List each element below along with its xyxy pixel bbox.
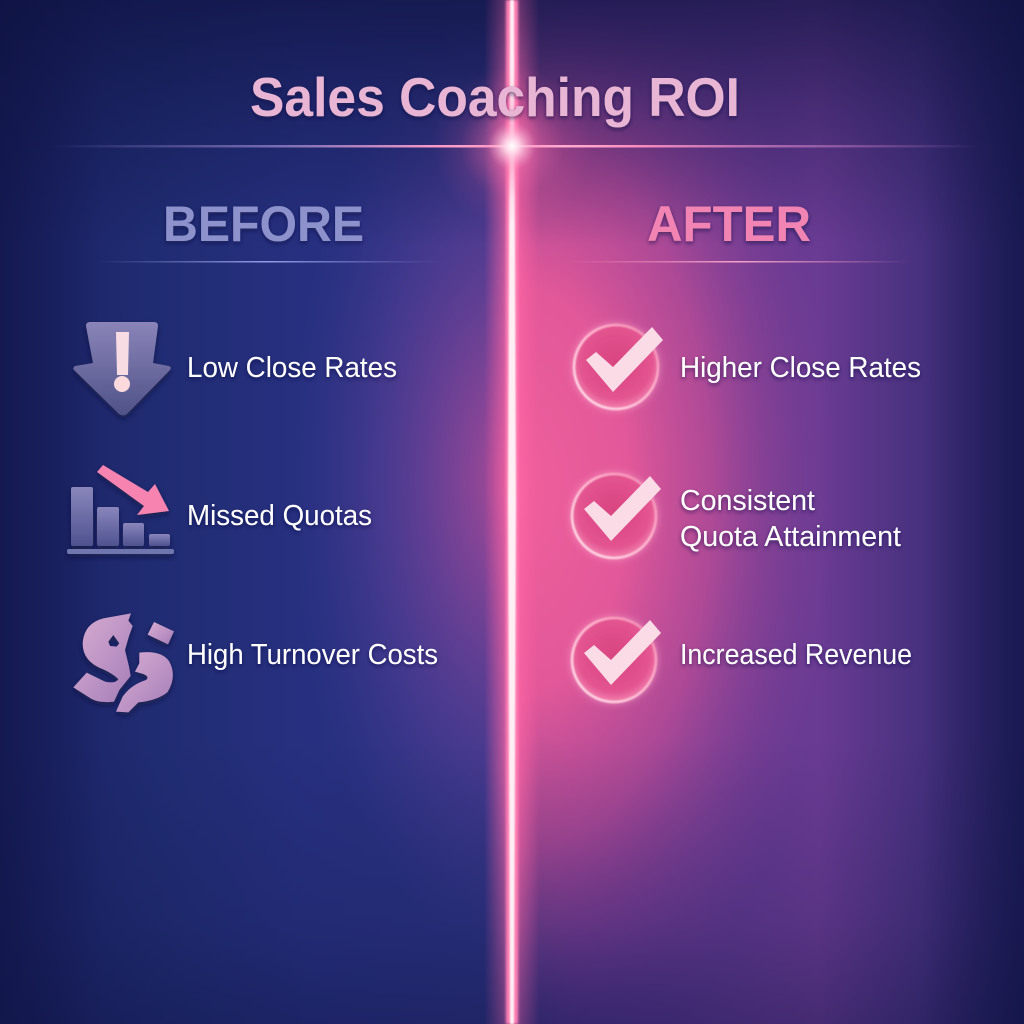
icon: broken dollar sign — [73, 613, 174, 712]
icon: warning down arrow — [73, 322, 171, 416]
central glowing divider — [484, 0, 540, 1024]
label: consistent quota attainment: Quota Attainment — [680, 521, 901, 553]
after heading rule — [565, 261, 910, 262]
heading: before: BEFORE — [163, 196, 364, 252]
label: missed quotas: Missed Quotas — [187, 500, 372, 532]
before heading rule — [95, 261, 440, 262]
label: consistent quota attainment: Consistent — [680, 485, 815, 517]
panel: before — [67, 196, 440, 712]
label: increased revenue: Increased Revenue — [680, 639, 912, 671]
heading: after: AFTER — [647, 196, 811, 252]
label: consistent quota attainment — [680, 485, 901, 553]
label: low close rates: Low Close Rates — [187, 352, 397, 384]
icon: check mark 2 — [572, 474, 661, 558]
title: Sales Coaching ROI — [250, 66, 740, 128]
label: high turnover costs: High Turnover Costs — [187, 639, 438, 671]
horizontal title rule with flare — [50, 66, 980, 226]
label: higher close rates: Higher Close Rates — [680, 352, 921, 384]
icon: falling bar chart — [67, 465, 174, 554]
icon: check mark 1 — [574, 325, 663, 409]
icon: check mark 3 — [572, 618, 661, 702]
panel: after — [565, 196, 921, 702]
